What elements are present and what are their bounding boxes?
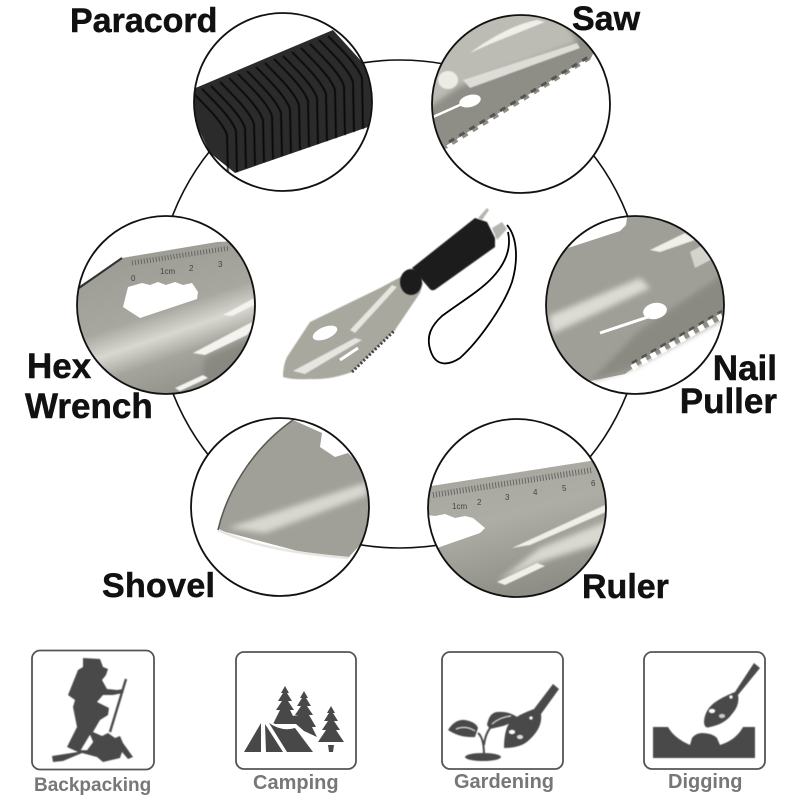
nail puller ring xyxy=(546,216,724,394)
saw ring xyxy=(432,15,610,193)
ruler photo: 6 xyxy=(591,479,596,488)
handle end tang xyxy=(478,208,507,240)
panel: paracord xyxy=(193,13,375,191)
blade hex hole xyxy=(311,323,339,343)
ruler photo: 4 xyxy=(533,488,538,497)
nail puller slot xyxy=(643,302,667,320)
ruler photo: 1cm xyxy=(452,502,467,511)
heading: Ruler: Ruler xyxy=(582,568,669,606)
collar xyxy=(400,269,422,295)
teeth xyxy=(632,316,722,368)
ruler photo: 2 xyxy=(477,498,482,507)
blade xyxy=(283,272,423,379)
icon card: backpacking xyxy=(32,650,154,796)
connecting ring xyxy=(156,60,644,548)
icon: trowel and soil xyxy=(653,663,760,758)
hex wrench photo xyxy=(78,242,254,394)
label: gardening: Gardening xyxy=(454,771,554,793)
ruler ring xyxy=(428,419,606,597)
saw teeth xyxy=(448,60,590,148)
center product: shovel with paracord handle and lanyard xyxy=(283,208,516,379)
hex hole xyxy=(123,282,198,318)
hex wrench photo: 3 xyxy=(218,260,223,269)
streaks xyxy=(203,338,247,384)
label: camping: Camping xyxy=(253,772,339,794)
icon: tent and trees xyxy=(244,686,344,752)
panel: nail puller xyxy=(545,215,725,395)
panel: ruler xyxy=(420,419,610,600)
hex wrench photo: 2 xyxy=(189,264,194,273)
ruler photo: 5 xyxy=(562,484,567,493)
heading: Hex Wrench: Wrench xyxy=(25,387,153,426)
icon: seedling and trowel xyxy=(448,684,559,761)
label: backpacking: Backpacking xyxy=(34,775,151,796)
nail puller photo xyxy=(546,216,724,384)
hex wrench photo: 0 xyxy=(131,274,136,283)
paracord ring xyxy=(194,13,372,191)
icon card: digging xyxy=(644,652,765,793)
panel: saw xyxy=(425,10,615,193)
ruler photo: 3 xyxy=(505,493,510,502)
heading: Hex Wrench: Hex xyxy=(27,347,92,386)
label: digging: Digging xyxy=(668,771,742,793)
ruler photo xyxy=(420,460,610,600)
hole xyxy=(429,514,485,548)
heading: Nail Puller: Puller xyxy=(680,382,777,421)
heading: Nail Puller: Nail xyxy=(713,349,777,388)
icon: hiker xyxy=(52,658,133,762)
panel: hex wrench xyxy=(70,216,260,400)
shovel tip photo xyxy=(218,420,375,558)
paracord wrap photo xyxy=(193,30,375,175)
ruler xyxy=(132,248,230,263)
icon card: camping xyxy=(236,652,356,794)
panel: shovel xyxy=(191,418,375,596)
heading: Paracord: Paracord xyxy=(70,2,217,40)
heading: Shovel: Shovel xyxy=(102,567,215,605)
lanyard xyxy=(429,225,516,363)
saw blade photo xyxy=(432,16,594,149)
blade teeth xyxy=(352,330,395,372)
blade slot xyxy=(340,348,358,360)
blade highlights xyxy=(293,285,397,374)
streaks xyxy=(500,520,604,580)
hex wrench ring xyxy=(77,216,255,394)
hex wrench photo: 1cm xyxy=(160,267,175,276)
icon card: gardening xyxy=(442,652,563,793)
key-slot xyxy=(459,94,481,108)
ruler ticks xyxy=(433,470,593,495)
shovel ring xyxy=(191,418,369,596)
paracord handle xyxy=(412,218,495,290)
heading: Saw: Saw xyxy=(572,0,641,38)
